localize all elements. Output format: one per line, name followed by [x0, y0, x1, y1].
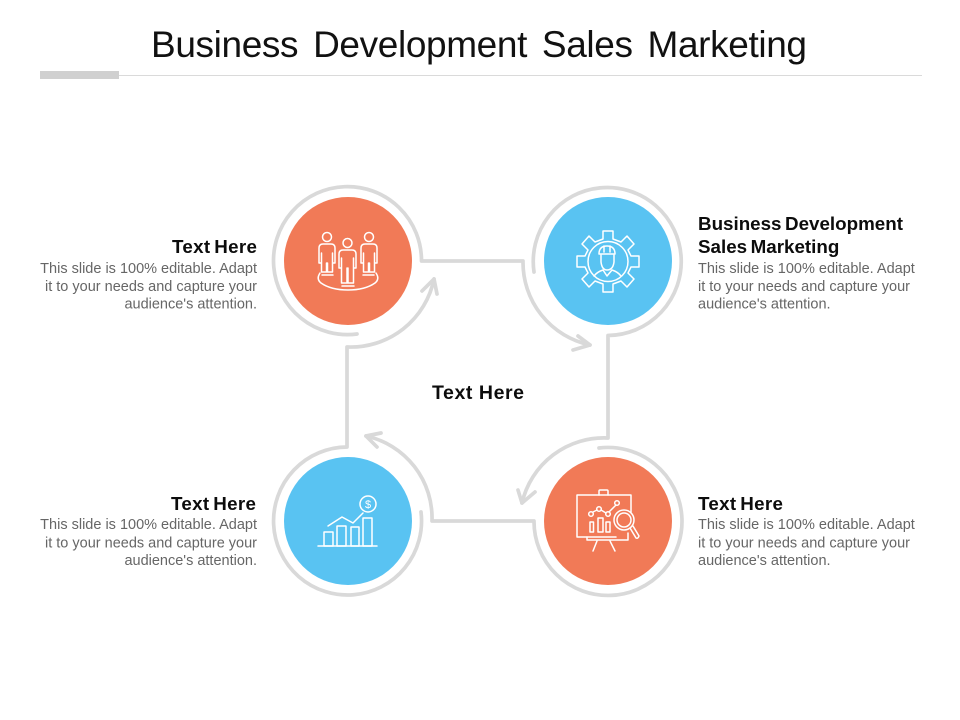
- circle: presentation: [544, 457, 672, 585]
- text block: bottom left: This slide is 100% editable. Adapt: [40, 517, 257, 533]
- icon: rising bars with dollar coin: $: [365, 499, 371, 511]
- circle: team: [284, 197, 412, 325]
- icon: gear with engineer: [577, 231, 639, 292]
- text block: bottom left: Text Here: [171, 493, 256, 514]
- title underline: [40, 71, 922, 79]
- text block: bottom right: audience's attention.: [698, 553, 831, 569]
- circle: growth chart: [284, 457, 412, 585]
- text block: top left: Text Here: [172, 236, 257, 257]
- text block: top right: [698, 213, 915, 312]
- text block: bottom right: Text Here: [698, 493, 783, 514]
- text block: top right: Sales Marketing: [698, 236, 839, 257]
- text block: bottom right: This slide is 100% editable. Adapt: [698, 517, 915, 533]
- cycle connector: bottom-left ring to top-left: [274, 279, 437, 595]
- center label: Text Here: [432, 382, 524, 404]
- cycle connector: top-right ring to bottom-right: [518, 188, 681, 503]
- icon: presentation board with magnifier: [577, 490, 639, 551]
- text block: top right: Business Development: [698, 213, 904, 234]
- icon: team of three people on a platform: [318, 232, 378, 290]
- text block: top left: it to your needs and capture your: [45, 279, 257, 295]
- text block: bottom left: it to your needs and capture your: [45, 536, 257, 552]
- text block: bottom right: it to your needs and capture your: [698, 536, 910, 552]
- text block: top right: it to your needs and capture your: [698, 279, 910, 295]
- icon: rising bars with dollar coin: [318, 496, 377, 546]
- text block: top left: [40, 236, 257, 312]
- text block: bottom right: [698, 493, 915, 569]
- cycle connector: top-left ring to top-right: [274, 187, 590, 350]
- circle: engineer gear: [544, 197, 672, 325]
- text block: top left: audience's attention.: [124, 296, 257, 312]
- text block: top right: This slide is 100% editable. Adapt: [698, 261, 915, 277]
- cycle connector: bottom-right ring to bottom-left: [366, 433, 682, 595]
- text block: bottom left: audience's attention.: [124, 553, 257, 569]
- title: Business Development Sales Marketing: [151, 24, 807, 65]
- text block: top right: audience's attention.: [698, 296, 831, 312]
- text block: top left: This slide is 100% editable. Adapt: [40, 261, 257, 277]
- text block: bottom left: [40, 493, 257, 569]
